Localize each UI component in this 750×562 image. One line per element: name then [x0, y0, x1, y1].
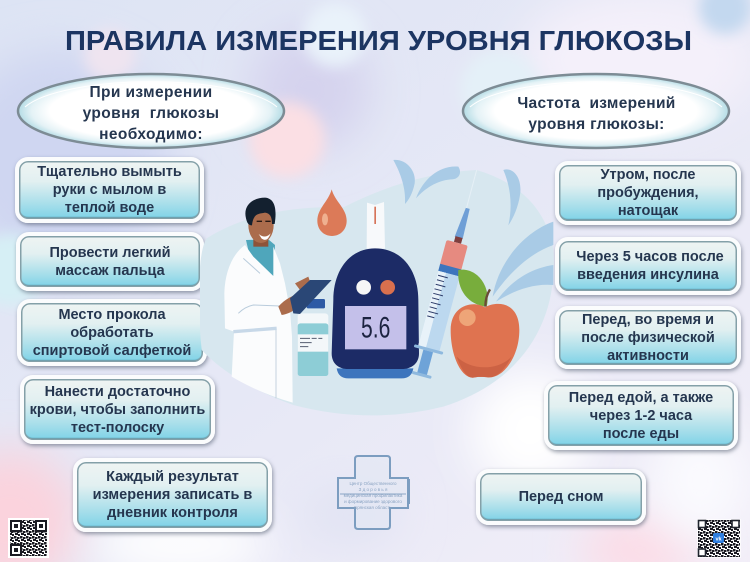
- QR code: right: vk: [715, 536, 722, 542]
- heading oval: right: [462, 72, 730, 150]
- frequency: before sleep: Перед сном: [519, 489, 603, 505]
- step: record result: [73, 458, 272, 532]
- QR code: left: [8, 518, 49, 558]
- frequency: morning: пробуждения,: [597, 185, 699, 201]
- step: apply blood: тест-полоску: [71, 420, 164, 436]
- step: record result: Каждый результат: [106, 469, 239, 485]
- icon: glucose meter: [332, 248, 419, 378]
- frequency: physical activity: после физической: [581, 330, 715, 346]
- frequency: meals: [544, 381, 738, 450]
- logo: public health centre cross: [337, 455, 410, 530]
- icon: test strip: [367, 202, 385, 249]
- heading oval: right: Частота измерений: [517, 95, 676, 112]
- logo: public health centre cross: Центр Общественного: [349, 481, 397, 486]
- logo: public health centre cross: и формирование здорового: [344, 499, 402, 504]
- step: apply blood: крови, чтобы заполнить: [30, 402, 205, 418]
- step: disinfect: Место прокола: [58, 306, 166, 322]
- frequency: after insulin: введения инсулина: [577, 267, 719, 283]
- step: massage finger: Провести легкий: [49, 244, 171, 260]
- QR code: right: [697, 519, 741, 558]
- logo: public health centre cross: З д о р о в ь я: [359, 487, 387, 492]
- step: disinfect: спиртовой салфеткой: [33, 342, 191, 358]
- frequency: meals: после еды: [603, 426, 679, 442]
- icon: blue splashes: [393, 160, 553, 302]
- frequency: morning: Утром, после: [600, 167, 696, 183]
- step: massage finger: массаж пальца: [55, 262, 165, 278]
- step: wash hands: руки с мылом в: [53, 182, 166, 198]
- frequency: morning: [555, 161, 741, 225]
- step: massage finger: [16, 232, 204, 291]
- logo: public health centre cross: Брянская область: [354, 505, 392, 510]
- step: wash hands: Тщательно вымыть: [37, 164, 182, 180]
- title: ПРАВИЛА ИЗМЕРЕНИЯ УРОВНЯ ГЛЮКОЗЫ: [65, 25, 692, 56]
- heading oval: left: При измерении: [89, 84, 213, 101]
- illustration backdrop: [199, 170, 554, 415]
- step: apply blood: [20, 375, 215, 444]
- heading oval: left: [16, 72, 286, 150]
- frequency: before sleep: [476, 469, 646, 525]
- heading oval: left: необходимо:: [99, 126, 203, 143]
- step: apply blood: Нанести достаточно: [45, 384, 190, 400]
- frequency: morning: натощак: [618, 203, 678, 219]
- frequency: physical activity: [555, 306, 741, 369]
- icon: apple: [451, 270, 519, 378]
- step: disinfect: обработать: [70, 324, 154, 340]
- frequency: physical activity: активности: [607, 348, 689, 364]
- icon: blood drop: [317, 189, 347, 236]
- icon: syringe: [407, 166, 491, 380]
- step: record result: дневник контроля: [107, 505, 238, 521]
- heading oval: left: уровня глюкозы: [83, 105, 219, 122]
- meter reading: 5.6: [361, 311, 390, 344]
- step: wash hands: [15, 157, 204, 223]
- heading oval: right: уровня глюкозы:: [528, 116, 665, 132]
- icon: doctor: [224, 198, 332, 403]
- icon: vial: [298, 299, 328, 376]
- frequency: after insulin: [555, 237, 741, 295]
- logo: public health centre cross: медицинская профилактика: [344, 493, 402, 498]
- frequency: meals: Перед едой, а также: [569, 390, 713, 406]
- step: record result: измерения записать в: [93, 487, 252, 503]
- frequency: meals: через 1-2 часа: [590, 408, 692, 424]
- central illustration: [200, 160, 554, 416]
- frequency: physical activity: Перед, во время и: [582, 312, 714, 328]
- step: disinfect: [17, 299, 207, 366]
- step: wash hands: теплой воде: [65, 200, 154, 216]
- frequency: after insulin: Через 5 часов после: [576, 249, 724, 265]
